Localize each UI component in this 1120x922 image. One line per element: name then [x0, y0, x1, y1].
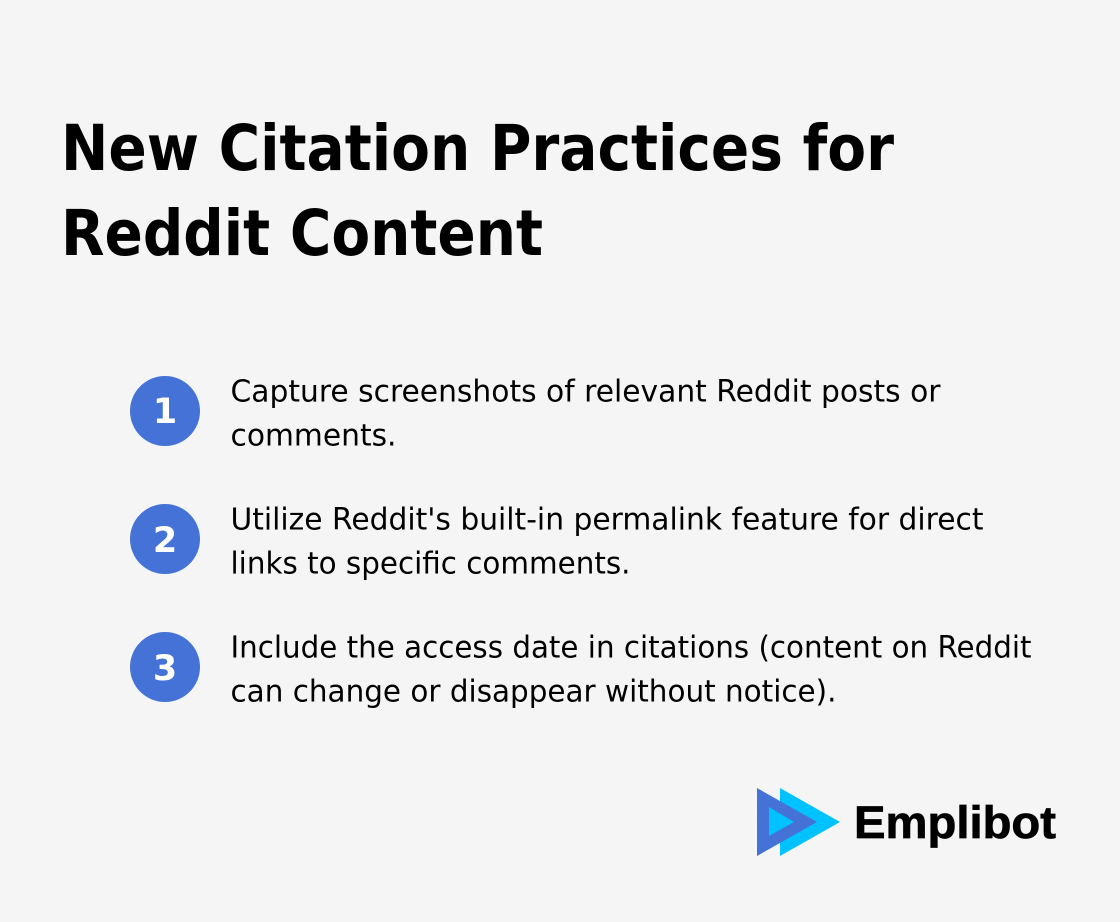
- step 2 text: links to specific comments.: [230, 546, 630, 582]
- step 3 number badge: 3: [153, 649, 177, 689]
- logo wordmark: Emplibot: [854, 797, 1056, 848]
- step 3 text: Include the access date in citations (content on Reddit: [230, 630, 1032, 666]
- step 2 number badge: 2: [153, 521, 177, 561]
- logo: Emplibot: [757, 788, 1056, 856]
- step 1 text: comments.: [230, 418, 396, 454]
- step 1 text: Capture screenshots of relevant Reddit posts or: [230, 374, 941, 410]
- icon: play triangles: [757, 788, 840, 856]
- step 1 number badge: 1: [153, 392, 177, 432]
- step 3: [130, 630, 1032, 710]
- step 3 text: can change or disappear without notice).: [230, 674, 836, 710]
- title: [61, 112, 894, 270]
- title: Reddit Content: [61, 197, 543, 270]
- step 1 number badge: [130, 376, 200, 446]
- step 2 number badge: [130, 504, 200, 574]
- step 3 text: [230, 630, 1032, 710]
- step 2 text: Utilize Reddit's built-in permalink feature for direct: [230, 502, 984, 538]
- step 2: [130, 502, 984, 582]
- title: New Citation Practices for: [61, 112, 894, 185]
- step 3 number badge: [130, 632, 200, 702]
- step 2 text: [230, 502, 984, 582]
- step 1 text: [230, 374, 941, 454]
- step 1: [130, 374, 941, 454]
